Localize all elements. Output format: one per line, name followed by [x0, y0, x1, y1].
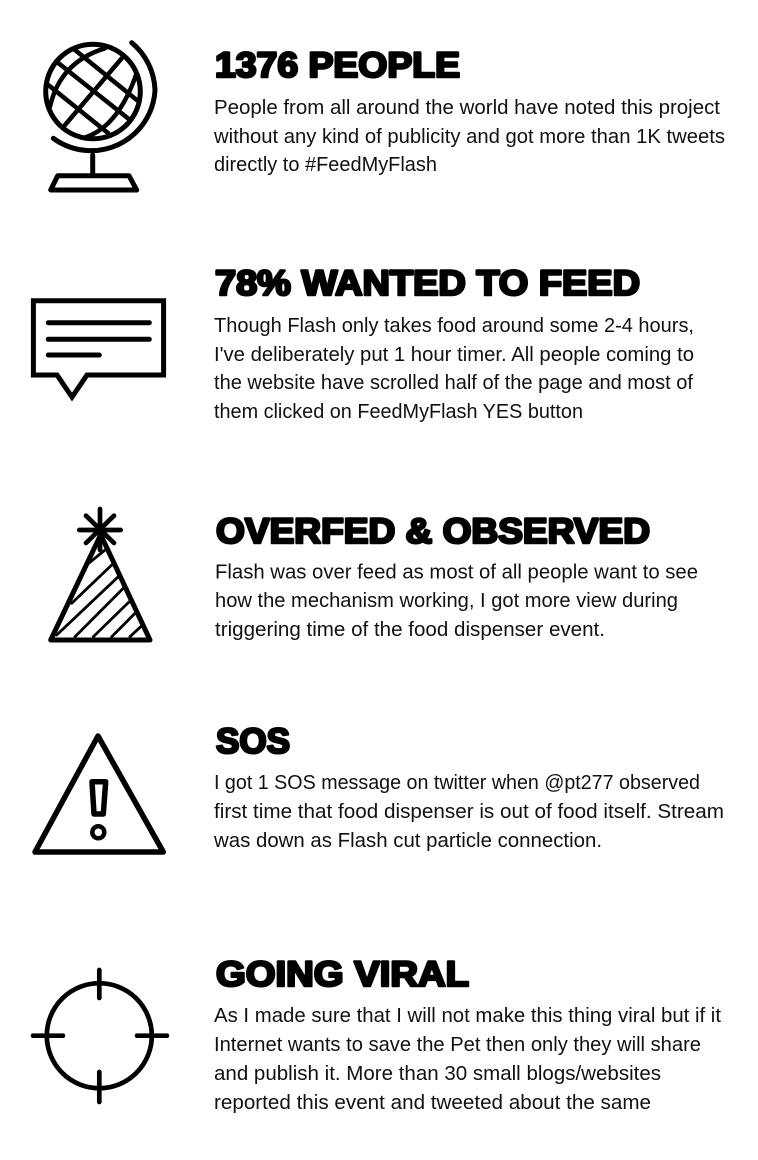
- section: sos: [213, 722, 724, 852]
- section: 1376 people: [213, 46, 725, 176]
- text block: going viral: reported this event and tweeted about the same: [214, 1092, 651, 1114]
- text block: overfed and observed: triggering time of the food dispenser event.: [215, 619, 605, 641]
- section: going viral: [214, 955, 721, 1114]
- text block: 1376 people: [213, 97, 725, 176]
- text block: 78% wanted to feed: [214, 315, 694, 423]
- text block: sos: I got 1 SOS message on twitter when @pt277 observed: [214, 772, 700, 794]
- heading: sos: SOS: [216, 722, 290, 761]
- icon: globe: [46, 43, 155, 190]
- text block: 1376 people: People from all around the world have noted this project: [214, 97, 720, 119]
- text block: overfed and observed: Flash was over feed as most of all people want to see: [215, 562, 698, 584]
- text block: 78% wanted to feed: the website have scrolled half of the page and most of: [214, 372, 693, 394]
- heading: overfed and observed: OVERFED & OBSERVED: [216, 512, 650, 551]
- icon: warning triangle: [35, 736, 163, 852]
- text block: 78% wanted to feed: Though Flash only takes food around some 2-4 hours,: [214, 315, 694, 337]
- text block: sos: first time that food dispenser is out of food itself. Stream: [214, 801, 724, 823]
- text block: going viral: As I made sure that I will not make this thing viral but if it: [214, 1005, 721, 1027]
- icon: party hat: [51, 509, 150, 640]
- text block: 78% wanted to feed: them clicked on FeedMyFlash YES button: [214, 401, 583, 423]
- text block: 1376 people: without any kind of publicity and got more than 1K tweets: [213, 126, 725, 148]
- text block: going viral: [214, 1005, 721, 1114]
- text block: overfed and observed: how the mechanism working, I got more view during: [215, 590, 678, 612]
- icon: crosshair: [33, 970, 167, 1102]
- text block: sos: [213, 772, 724, 852]
- text block: going viral: and publish it. More than 30 small blogs/websites: [214, 1063, 661, 1085]
- text block: 1376 people: directly to #FeedMyFlash: [214, 154, 437, 176]
- section: overfed and observed: [215, 512, 698, 641]
- section: 78% wanted to feed: [214, 264, 694, 423]
- heading: 78% wanted to feed: 78% WANTED TO FEED: [215, 264, 640, 303]
- heading: going viral: GOING VIRAL: [216, 955, 469, 994]
- text block: going viral: Internet wants to save the Pet then only they will share: [214, 1034, 701, 1056]
- text block: overfed and observed: [215, 562, 698, 641]
- text block: sos: was down as Flash cut particle connection.: [213, 830, 602, 852]
- heading: 1376 people: 1376 PEOPLE: [215, 46, 460, 85]
- text block: 78% wanted to feed: I've deliberately put 1 hour timer. All people coming to: [214, 344, 694, 366]
- icon: speech bubble: [33, 301, 164, 397]
